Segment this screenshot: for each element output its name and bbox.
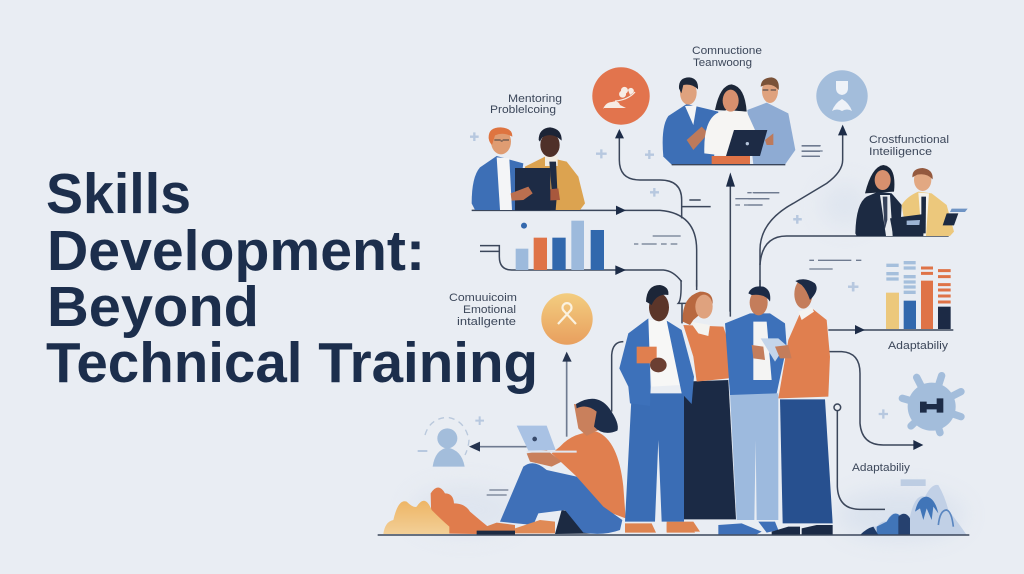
man in blue suit [663,77,718,165]
bar chart: right striped [886,263,951,329]
woman in dark suit [855,165,902,236]
person 2: orange top [667,292,746,532]
ground line [378,533,969,537]
icon: gear [902,376,961,433]
pair: mentoring [472,127,585,210]
connector network: lower right [612,280,953,509]
four standing colleagues [378,279,969,535]
connector network: upper left [470,129,820,317]
soft shading [410,183,965,540]
icon: profile [418,416,484,467]
title: Skills [46,162,191,226]
icon: orange circle [592,67,650,125]
label: Problelcoing: Problelcoing [490,104,556,116]
dashes [487,490,508,495]
up arrow to circle [562,352,572,437]
folder [515,168,550,210]
title: Technical Training [46,331,538,395]
laptop [726,130,767,156]
icon: yellow ribbon circle [541,293,593,345]
label: Comnuctione: Comnuctione [692,45,762,57]
title [46,162,538,395]
right person [523,127,585,210]
label: Comuuicoim: Comuuicoim [449,292,517,304]
label: Mentoring: Mentoring [508,93,562,105]
plants: blue [860,479,967,535]
icon: blue person circle [816,70,868,122]
label: Adaptabiliy lower: Adaptabiliy [852,462,911,474]
podium [712,156,750,165]
man in yellow blazer [902,168,954,236]
woman figure [477,399,626,535]
left person [472,127,523,210]
person 1: blue suit [619,285,695,533]
laptop [517,426,577,452]
folder and tablet [890,214,924,236]
team: three people with laptop [663,77,795,165]
hands [511,187,533,201]
bar chart: left [516,221,604,270]
label: Crostfunctional: Crostfunctional [869,134,949,146]
pair: cross-functional [855,165,968,236]
left arrow to profile icon [469,442,527,452]
label: Teanwoong: Teanwoong [693,57,752,69]
title: Development: [47,219,425,283]
man in light blue shirt [747,77,795,165]
plants: orange and yellow [383,487,490,534]
person 3: blue jacket [718,286,787,534]
label: Emotional: Emotional [463,304,516,316]
scene: sitting woman [383,352,626,535]
label: Inteiligence: Inteiligence [869,146,932,158]
label: intallgente: intallgente [457,316,516,328]
woman in white [704,84,755,156]
connector network: upper right [748,125,949,291]
person 4: orange sweater [761,279,833,535]
label: Adaptabiliy upper: Adaptabiliy [888,340,949,352]
title: Beyond [47,275,259,339]
